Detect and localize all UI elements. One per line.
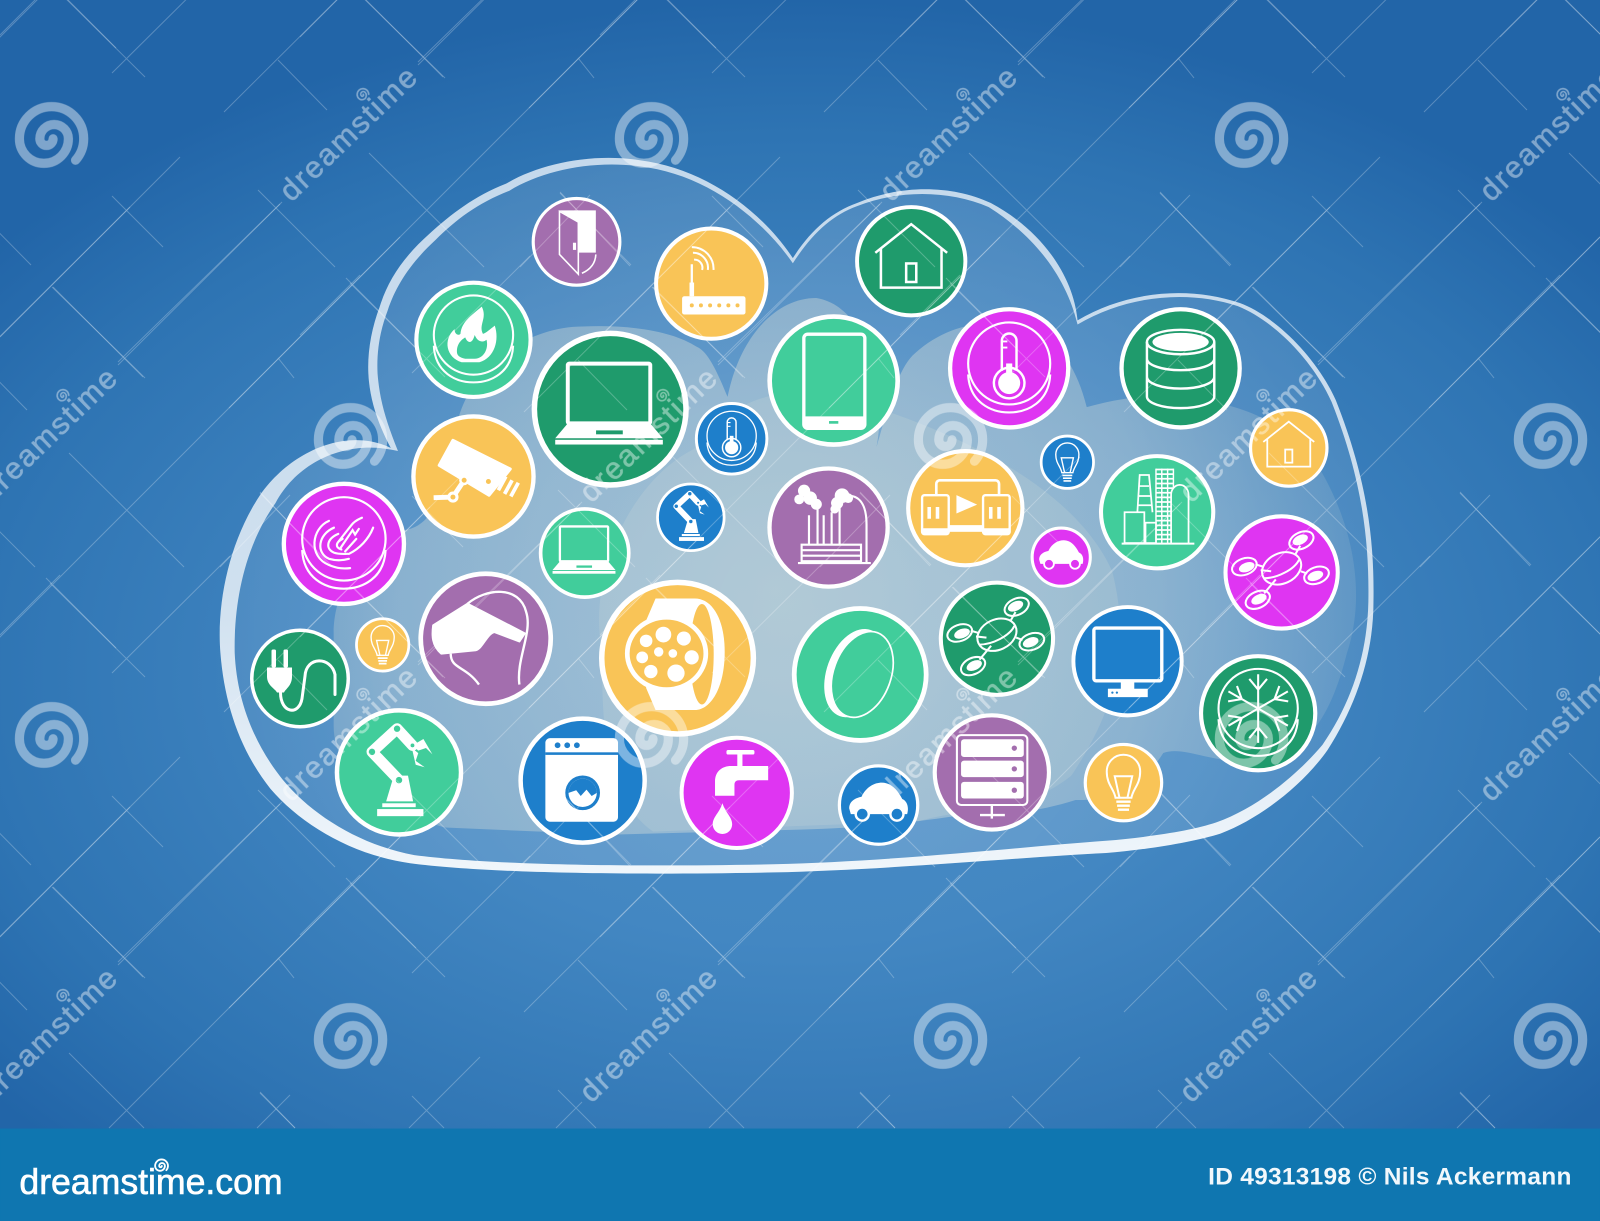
- icon: robot arm blue: [658, 484, 724, 551]
- watermark text: dreamstime: [1172, 361, 1324, 509]
- icon: water tap: [682, 738, 792, 848]
- icon: robot arm teal: [337, 710, 461, 834]
- cloud centre light layer: [599, 391, 1120, 832]
- watermark text: dreamstime: [572, 361, 724, 509]
- icon: bulb yellow large: [1085, 744, 1162, 821]
- icon: car magenta: [1032, 528, 1090, 586]
- icon: washing machine: [521, 719, 645, 843]
- icon: smart ring: [794, 609, 926, 740]
- watermark text: dreamstime: [872, 660, 1024, 808]
- icon: security camera: [413, 416, 534, 537]
- icon: database: [1122, 309, 1240, 427]
- watermark text: dreamstime: [272, 660, 424, 808]
- icon: car blue: [839, 766, 918, 844]
- icon: snowflake button: [1201, 656, 1315, 770]
- watermark text: dreamstime: [272, 60, 424, 208]
- cloud shape: [220, 158, 1374, 874]
- icon: large laptop: [534, 333, 686, 485]
- watermark spirals: [19, 107, 1583, 1064]
- icon: drone magenta: [1225, 516, 1338, 629]
- icon: monitor: [1073, 607, 1182, 715]
- cloud inner light layer: [334, 298, 1356, 835]
- icon: bulb yellow small: [356, 619, 409, 671]
- footer logo: dreamstime.com: [19, 1162, 283, 1202]
- icon: flame button: [416, 283, 531, 397]
- icon: smart watch: [602, 582, 753, 734]
- icon: media devices: [908, 451, 1022, 565]
- icon: server rack: [935, 715, 1049, 830]
- footer band: [0, 1129, 1600, 1221]
- cloud outline: [220, 158, 1374, 874]
- device icons: [252, 199, 1338, 848]
- icon: bulb blue: [1041, 436, 1094, 488]
- icon: door: [533, 199, 620, 285]
- icon: power plug: [252, 630, 348, 727]
- watermark text: dreamstime: [872, 60, 1024, 208]
- icon: home green: [857, 207, 965, 315]
- cloud translucent fill: [220, 158, 1374, 874]
- icon: drone green: [941, 583, 1053, 695]
- icon: home yellow: [1251, 410, 1327, 486]
- icon: fingerprint: [284, 484, 404, 604]
- icon: small laptop: [541, 509, 629, 597]
- icon: VR headset: [421, 574, 551, 704]
- icon: thermometer blue: [696, 404, 767, 474]
- watermark text: dreamstime: [1172, 961, 1324, 1109]
- icon: wifi router: [656, 229, 766, 339]
- footer credit: ID 49313198 © Nils Ackermann: [1208, 1164, 1571, 1191]
- icon: factory: [769, 468, 888, 587]
- icon: thermometer magenta: [950, 309, 1068, 427]
- icon: tablet: [770, 317, 898, 445]
- watermark text: dreamstime: [572, 961, 724, 1109]
- icon: city buildings: [1101, 456, 1213, 568]
